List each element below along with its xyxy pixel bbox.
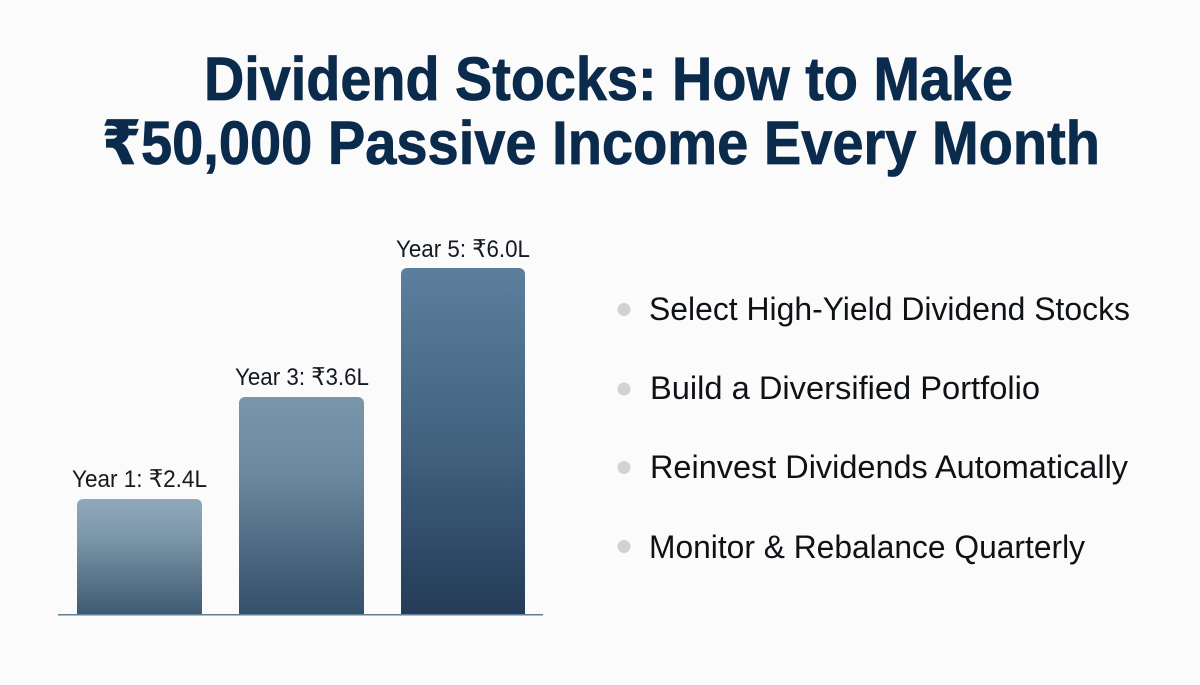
bar: year 5 [396,236,530,614]
chart baseline [58,614,543,616]
step 1: Select High-Yield Dividend Stocks [649,291,1130,327]
bar: year 5: Year 5: ₹6.0L [396,236,530,263]
title: ₹50,000 Passive Income Every Month [102,109,1100,177]
bar chart [58,236,543,616]
bar: year 1 [72,466,207,614]
title: Dividend Stocks: How to Make [204,45,1013,113]
bar: year 3 [235,364,369,614]
title [102,45,1100,177]
step 3: Reinvest Dividends Automatically [650,449,1128,485]
step 2: Build a Diversified Portfolio [650,370,1040,406]
bar: year 3: Year 3: ₹3.6L [235,364,369,391]
list of steps [618,291,1130,565]
step 4: Monitor & Rebalance Quarterly [649,529,1085,565]
bar: year 1: Year 1: ₹2.4L [72,466,207,493]
